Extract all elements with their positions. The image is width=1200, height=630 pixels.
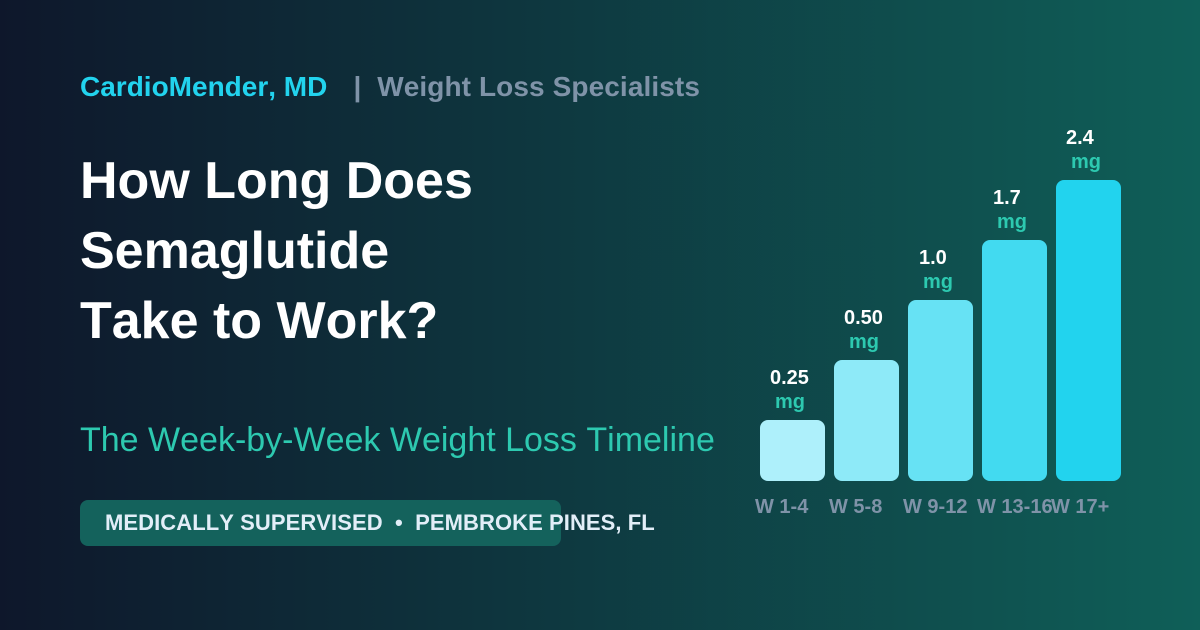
bar: week 17+ (1056, 180, 1121, 481)
value label: 1.7 mg: 1.7 (993, 187, 1021, 209)
value label: 1.0 mg: 1.0 (919, 247, 947, 269)
bar: week 13-16 (982, 240, 1047, 481)
unit label: mg (775, 391, 805, 413)
unit label: mg (923, 271, 953, 293)
unit label: mg (849, 331, 879, 353)
value label: 0.25 mg: 0.25 (770, 367, 809, 389)
unit label: mg (997, 211, 1027, 233)
title: Semaglutide (80, 222, 389, 280)
brand name: CardioMender, MD (80, 71, 327, 102)
week label: W 13-16 (977, 496, 1053, 518)
week label: W 9-12 (903, 496, 967, 518)
badge (80, 500, 561, 546)
week label: W 5-8 (829, 496, 882, 518)
title: How Long Does (80, 152, 473, 210)
value label: 2.4 mg: 2.4 (1066, 127, 1094, 149)
title (80, 152, 473, 350)
badge text: MEDICALLY SUPERVISED • PEMBROKE PINES, FL (105, 510, 655, 535)
bar: week 9-12 (908, 300, 973, 481)
title: Take to Work? (80, 292, 438, 350)
bar: week 1-4 (760, 420, 825, 481)
value label: 0.50 mg: 0.50 (844, 307, 883, 329)
bar chart (760, 127, 1121, 481)
week label: W 17+ (1051, 496, 1109, 518)
unit label: mg (1071, 151, 1101, 173)
subtitle: The Week-by-Week Weight Loss Timeline (80, 421, 715, 459)
brand tagline: | Weight Loss Specialists (354, 71, 700, 102)
bar: week 5-8 (834, 360, 899, 481)
week label: W 1-4 (755, 496, 808, 518)
